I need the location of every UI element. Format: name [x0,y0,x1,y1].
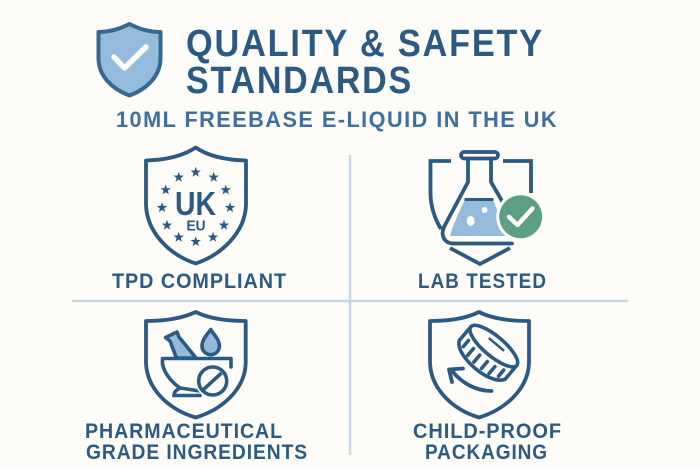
subtitle: 10ML FREEBASE E-LIQUID IN THE UK [116,107,558,132]
label: child-proof packaging [413,420,562,464]
icon: flask in shield with check badge [430,152,545,264]
label: lab tested: LAB TESTED [418,270,547,293]
panel: child-proof packaging [413,312,562,464]
icon: mortar, pestle, drop and pill in shield [146,312,246,418]
label: pharmaceutical grade ingredients [85,420,308,464]
title: QUALITY & SAFETY [186,23,544,65]
panel: pharmaceutical grade ingredients [85,312,308,464]
title [186,23,544,102]
icon: UK EU shield with stars [146,148,246,264]
title: STANDARDS [186,60,413,102]
header [98,23,558,132]
panel: lab tested [418,152,547,293]
label: pharmaceutical grade ingredients: PHARMACEUTICAL [85,420,283,443]
label: pharmaceutical grade ingredients: GRADE INGREDIENTS [86,441,308,464]
icon: UK EU shield with stars: UK [175,185,216,222]
icon: bottle cap and arrow in shield [430,312,529,418]
label: child-proof packaging: PACKAGING [425,441,548,464]
icon: header shield with check [98,24,160,96]
panel: TPD compliant [112,148,287,293]
label: TPD compliant: TPD COMPLIANT [112,270,287,293]
icon: UK EU shield with stars: EU [186,218,206,234]
label: child-proof packaging: CHILD-PROOF [413,420,562,443]
